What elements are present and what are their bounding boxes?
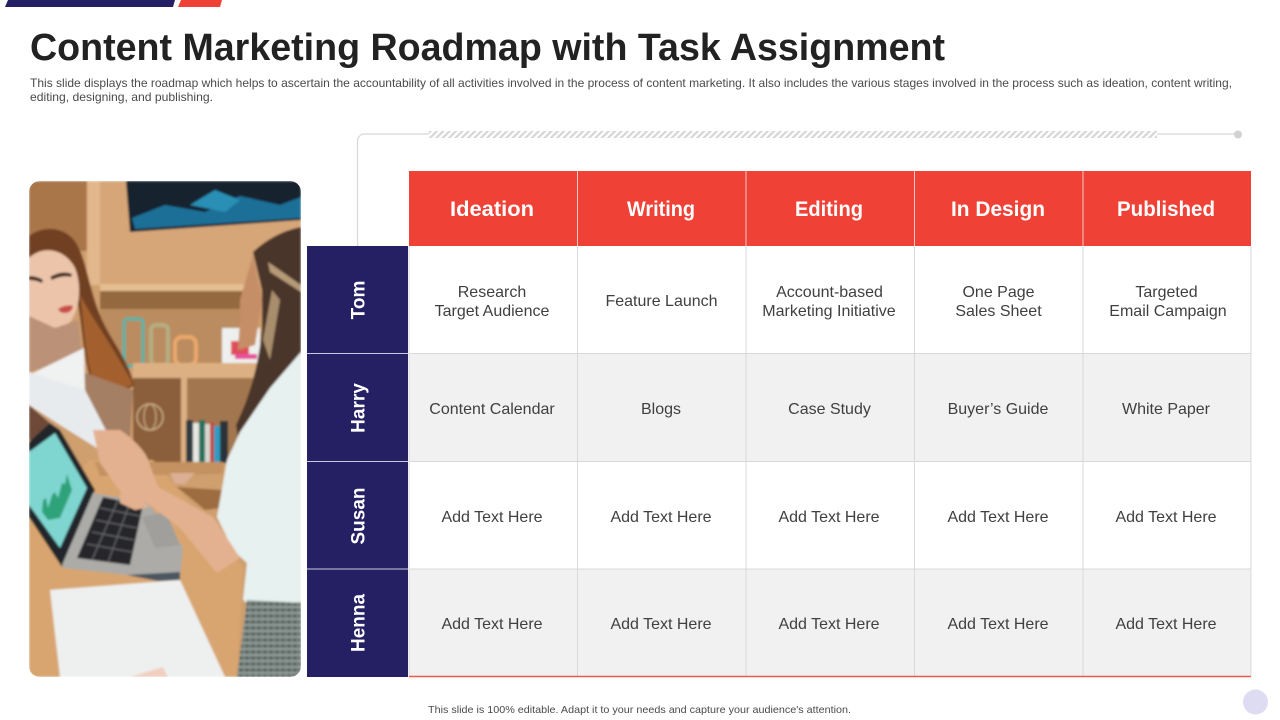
arm and hand [93, 430, 240, 573]
description text: This slide displays the roadmap which helps to ascertain the accountability of all activities involved in the process of content marketing. It also includes the various stages involved in the process such as ideation, content writing, [30, 76, 1232, 90]
paper on desk [50, 580, 225, 677]
row: Susan: Add Text Here [1115, 509, 1217, 526]
row names [307, 246, 408, 677]
description text: editing, designing, and publishing. [30, 90, 213, 104]
woman left: hair, face, jacket [29, 229, 134, 390]
laptop [29, 423, 95, 567]
corner dot [1243, 690, 1268, 714]
row: Tom: Research [458, 284, 526, 301]
column headers: Published [1117, 198, 1215, 221]
title: Content Marketing Roadmap with Task Assignment [30, 27, 945, 69]
row: Harry: Buyer’s Guide [948, 401, 1048, 418]
column headers: Ideation [450, 198, 534, 221]
row: Tom: Targeted [1135, 284, 1198, 301]
row names: Tom [348, 281, 370, 319]
row: Tom: One Page [962, 284, 1035, 301]
row: Harry [429, 401, 1211, 418]
column headers: In Design [951, 198, 1045, 221]
column headers [409, 171, 1251, 246]
row: Tom: Email Campaign [1109, 303, 1227, 320]
top accent bars [5, 0, 222, 7]
row: Susan: Add Text Here [441, 509, 543, 526]
row names: Harry [348, 383, 370, 433]
row: Henna [441, 616, 1217, 633]
table [307, 171, 1251, 677]
column headers: Editing [795, 198, 863, 221]
row: Susan: Add Text Here [947, 509, 1049, 526]
row: Susan [441, 509, 1217, 526]
row: Harry: White Paper [1122, 401, 1211, 418]
row: Henna: Add Text Here [947, 616, 1049, 633]
row: Harry: Content Calendar [429, 401, 555, 418]
shirt and trousers [217, 352, 301, 607]
column headers: Writing [627, 198, 695, 221]
row: Tom [435, 284, 1227, 320]
cell backgrounds and grid [409, 246, 1251, 676]
row: Henna: Add Text Here [778, 616, 880, 633]
row: Henna: Add Text Here [441, 616, 543, 633]
row: Tom: Marketing Initiative [762, 303, 896, 320]
row names: Henna [348, 594, 370, 652]
row: Susan: Add Text Here [778, 509, 880, 526]
row: Tom: Feature Launch [605, 293, 718, 310]
photo: two women working at a laptop [29, 181, 301, 677]
row: Henna: Add Text Here [1115, 616, 1217, 633]
row names: Susan [348, 487, 370, 545]
row: Tom: Account-based [776, 284, 883, 301]
row: Henna: Add Text Here [610, 616, 712, 633]
description text [30, 76, 1232, 104]
footer note: This slide is 100% editable. Adapt it to your needs and capture your audience's attention. [428, 704, 851, 716]
row: Susan: Add Text Here [610, 509, 712, 526]
woman right: face and hair [238, 255, 262, 350]
row: Harry: Blogs [641, 401, 681, 418]
row: Tom: Sales Sheet [955, 303, 1042, 320]
row: Tom: Target Audience [435, 303, 549, 320]
connector line with hatch bar and end dot [358, 130, 1242, 246]
desk [29, 460, 243, 677]
row: Harry: Case Study [788, 401, 871, 418]
